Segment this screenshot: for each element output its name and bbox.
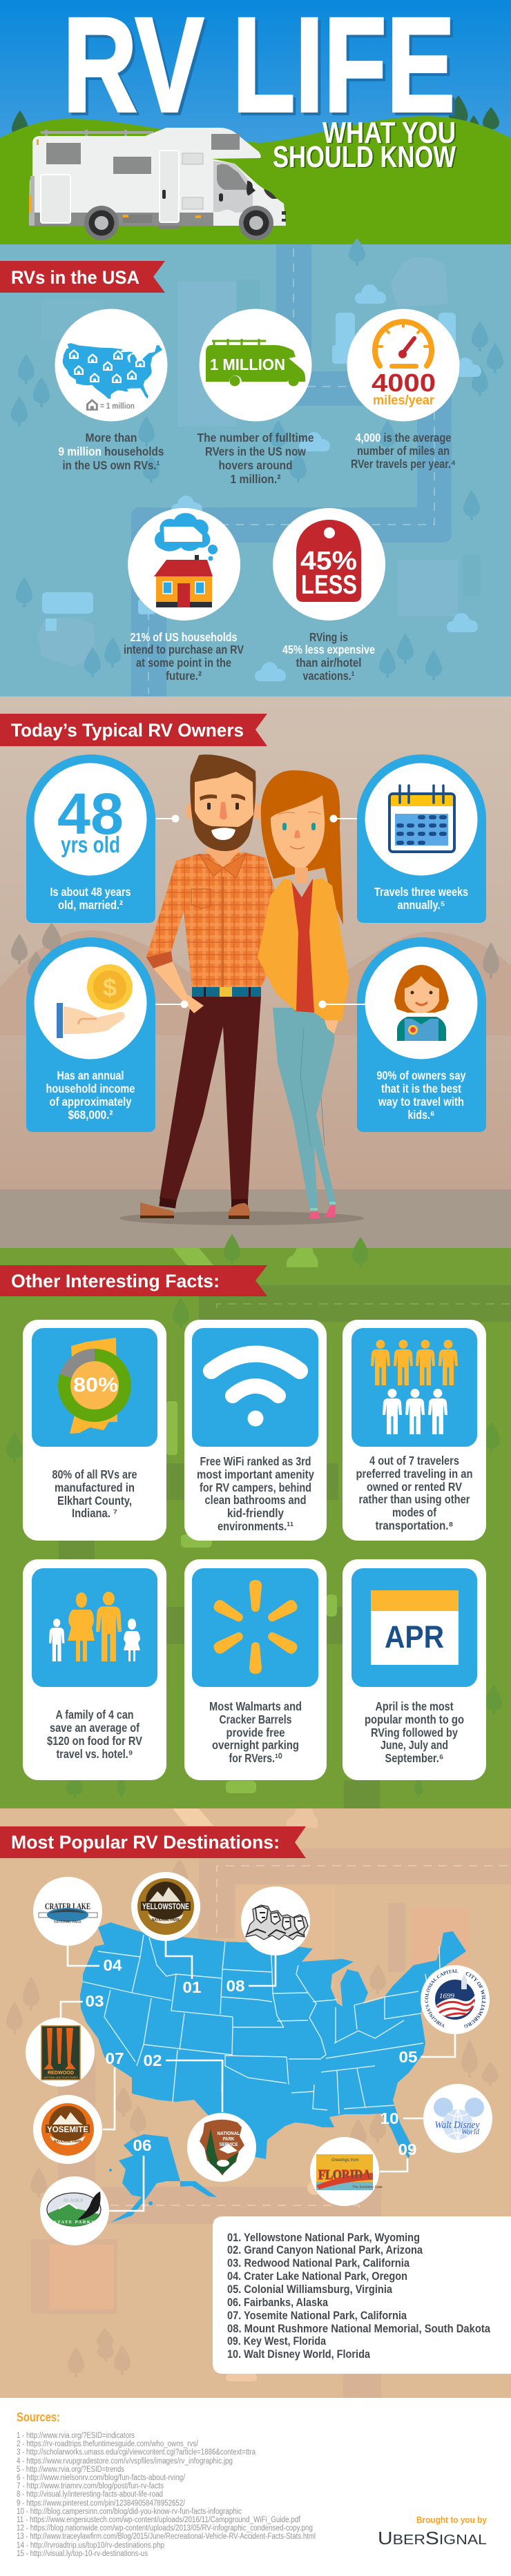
- legend: destination list: 06. Fairbanks, Alaska: [227, 2296, 328, 2309]
- map: contiguous United States: [80, 1922, 466, 2159]
- ribbon: Today's Typical RV Owners: [0, 714, 267, 746]
- text block: source list: 5 - http://www.rvia.org/?ESID=trends: [17, 2466, 124, 2474]
- ribbon: RVs in the USA: RVs in the USA: [11, 267, 139, 288]
- legend: destination list: 01. Yellowstone National Park, Wyoming: [227, 2231, 420, 2244]
- logo: Alaska State Parks: STATE PARKS: [54, 2220, 94, 2225]
- card: 4 out of 7 travelers: 4 out of 7 travelers: [369, 1454, 459, 1467]
- subtitle: what you should know: WHAT YOU: [322, 116, 456, 150]
- stat: 4000 miles per year: RVer travels per year.⁴: [351, 457, 456, 471]
- stat: 45% less expensive: vacations.¹: [302, 669, 355, 683]
- card: 80% Elkhart County: [23, 1320, 166, 1541]
- logo: Crater Lake: [33, 1877, 102, 1946]
- text block: source list: 1 - http://www.rvia.org/?ESID=indicators: [17, 2432, 135, 2440]
- logo: National Park Service: PARK: [222, 2137, 235, 2142]
- card: travels three weeks: Travels three weeks: [374, 885, 468, 899]
- legend: destination list: [213, 2216, 511, 2374]
- map numbers: 01: [182, 1978, 202, 1996]
- map numbers: 07: [105, 2049, 124, 2067]
- card: 4 out of 7 travelers: modes of: [392, 1505, 436, 1519]
- card: 4 out of 7 travelers: owned or rented RV: [367, 1480, 462, 1494]
- illustration: motorhome: [29, 128, 286, 240]
- logo: Colonial Williamsburg: CITY OF WILLIAMSBURG: [464, 1972, 485, 2028]
- stat: 4000 miles per year: miles/year: [373, 393, 435, 408]
- card: travel with kids: that it is the best: [381, 1082, 461, 1095]
- card: Walmarts and Cracker Barrels: provide free: [226, 1726, 285, 1739]
- stat: 45% less expensive: 45%: [300, 547, 357, 576]
- card: family of 4 saves: $120 on food for RV: [47, 1734, 142, 1748]
- card: Walmarts and Cracker Barrels: Most Walmarts and: [209, 1699, 302, 1713]
- stat: 9 million households: 9 million households: [58, 445, 164, 458]
- card: travels three weeks: annually.⁵: [398, 898, 445, 912]
- logo: National Park Service: SERVICE: [220, 2143, 238, 2147]
- logo: Redwood: REDWOOD: [48, 2069, 75, 2076]
- ribbon: Other Interesting Facts: Other Interesting Facts:: [11, 1271, 220, 1291]
- stat: 21% intend to purchase: at some point in the: [136, 656, 231, 670]
- subtitle: what you should know: [273, 116, 457, 175]
- stat: 45% less expensive: LESS: [301, 570, 357, 600]
- map numbers: 10: [380, 2109, 399, 2127]
- card: 48 years old: yrs old: [61, 832, 120, 857]
- card: household income: $: [103, 973, 117, 1002]
- map numbers: 03: [86, 1992, 104, 2010]
- man: [140, 754, 291, 1219]
- card: 80% Elkhart County: Elkhart County,: [57, 1494, 132, 1507]
- card: April most popular: RVing followed by: [371, 1726, 458, 1739]
- text block: source list: [17, 2432, 316, 2558]
- text block: source list: 3 - http://scholarworks.umass.edu/cgi/viewcontent.cgi?article=1886&context=ttra: [17, 2448, 256, 2457]
- card: household income: household income: [46, 1082, 135, 1095]
- card: travel with kids: 90% of owners say: [377, 1069, 466, 1082]
- card: free WiFi: for RV campers, behind: [200, 1481, 311, 1494]
- card: family of 4 saves: [23, 1559, 166, 1780]
- card: April most popular: popular month to go: [365, 1713, 464, 1726]
- stat: 9 million households: More than: [86, 431, 137, 445]
- stat: 1 million fulltime RVers: [197, 309, 314, 486]
- subtitle: what you should know: WHAT YOU: [324, 117, 457, 150]
- card: household income: [26, 937, 155, 1132]
- map numbers: 05: [399, 2048, 418, 2066]
- map numbers: 06: [133, 2136, 152, 2154]
- connectors to couple: [155, 815, 365, 1008]
- card: 4 out of 7 travelers: [343, 1320, 486, 1541]
- woman: [258, 770, 349, 1218]
- card: travel with kids: way to travel with: [378, 1095, 464, 1109]
- card: household income: Has an annual: [57, 1069, 124, 1082]
- map numbers: [86, 1956, 418, 2158]
- logo: Redwood: [26, 2018, 95, 2087]
- stat: 4000 miles per year: 4,000 is the average: [355, 431, 452, 445]
- map numbers: 02: [144, 2051, 162, 2069]
- stat: 9 million households: in the US own RVs.¹: [62, 458, 160, 472]
- credit: brought to you by UberSignal: [378, 2515, 487, 2548]
- logo: Florida postcard: [310, 2137, 383, 2206]
- text block: source list: 13 - http://www.traceylawfirm.com/Blog/2015/June/Recreational-Vehicle-RV-Accident-Facts-Stats.html: [17, 2533, 316, 2541]
- card: travel with kids: [357, 937, 486, 1132]
- ribbon: Today's Typical RV Owners: Today’s Typical RV Owners: [11, 720, 244, 741]
- card: April most popular: September.⁶: [385, 1751, 443, 1765]
- text block: source list: 15 - http://visual.ly/top-10-rv-destinations-us: [17, 2550, 148, 2558]
- map numbers: 04: [104, 1956, 122, 1974]
- connector lines: [61, 1940, 455, 2211]
- text block: source list: 11 - https://www.engeniustech.com/wp-content/uploads/2016/11/Campground_WiFi_Guide.pdf: [17, 2516, 301, 2524]
- stat: 1 million fulltime RVers: RVers in the US now: [205, 445, 306, 458]
- logo: Mount Rushmore: [241, 1886, 310, 1955]
- logo: Yosemite: [33, 2095, 102, 2164]
- card: family of 4 saves: A family of 4 can: [55, 1708, 134, 1721]
- card: 80% Elkhart County: 80% of all RVs are: [52, 1467, 137, 1481]
- card: April most popular: APR: [385, 1619, 444, 1655]
- logo: Colonial Williamsburg: [421, 1965, 490, 2034]
- card: 80% Elkhart County: 80%: [73, 1374, 118, 1396]
- logo: Yellowstone: YELLOWSTONE: [142, 1902, 189, 1911]
- text block: source list: 8 - http://visual.ly/interesting-facts-about-life-road: [17, 2490, 163, 2499]
- map: Alaska: [109, 2134, 217, 2223]
- stat: 1 million fulltime RVers: hovers around: [218, 458, 293, 472]
- panel: Today's Typical RV Owners: [0, 696, 511, 1248]
- legend: destination list: 02. Grand Canyon National Park, Arizona: [227, 2243, 423, 2256]
- logo: Florida postcard: FLORIDA: [318, 2167, 371, 2183]
- logo: Alaska State Parks: ALASKA: [63, 2198, 84, 2203]
- stat: 21% intend to purchase: 21% of US households: [130, 630, 238, 644]
- map numbers: 09: [398, 2140, 417, 2158]
- text block: source list: 4 - https://www.rvupgradestore.com/v/vspfiles/images/rv_infographic.jpg: [17, 2457, 233, 2466]
- legend: destination list: 05. Colonial Williamsburg, Virginia: [227, 2283, 392, 2296]
- card: travel with kids: kids.⁶: [407, 1108, 435, 1122]
- panel: RVs in the USA: [0, 238, 511, 696]
- ribbon: Most Popular RV Destinations: [0, 1826, 306, 1858]
- card: free WiFi: clean bathrooms and: [204, 1493, 307, 1507]
- text block: source list: 10 - http://blog.campersinn.com/blog/did-you-know-rv-fun-facts-infographic: [17, 2508, 242, 2516]
- card: household income: $68,000.²: [68, 1108, 113, 1122]
- logo: Crater Lake: CRATER LAKE: [45, 1901, 90, 1911]
- logo: Yosemite: YOSEMITE: [47, 2125, 88, 2134]
- panel: Other Interesting Facts: [0, 1234, 511, 1808]
- card: family of 4 saves: save an average of: [50, 1721, 139, 1735]
- legend: destination list: 09. Key West, Florida: [227, 2334, 326, 2348]
- stat: 9 million households: [55, 309, 167, 472]
- illustration: couple: [119, 754, 364, 1225]
- stat: 21% intend to purchase: [124, 508, 244, 683]
- card: 4 out of 7 travelers: rather than using other: [359, 1492, 470, 1506]
- text block: source list: 14 - http://rvroadtrip.us/top10/rv-destinations.php: [17, 2541, 164, 2550]
- logo: Yellowstone: [131, 1872, 200, 1941]
- card: 48 years old: 48: [57, 781, 124, 846]
- card: household income: of approximately: [50, 1095, 132, 1109]
- stat: 21% intend to purchase: intend to purchase an RV: [124, 643, 244, 656]
- logo: Colonial Williamsburg: 1699: [439, 1992, 454, 2000]
- stat: 45% less expensive: 45% less expensive: [282, 643, 375, 656]
- credit: brought to you by UberSignal: UBERSIGNAL: [378, 2528, 487, 2548]
- card: free WiFi: environments.¹¹: [218, 1519, 293, 1533]
- card: Walmarts and Cracker Barrels: overnight parking: [212, 1738, 299, 1752]
- logo: Alaska State Parks: [40, 2176, 109, 2245]
- subtitle: what you should know: SHOULD KNOW: [273, 140, 456, 174]
- logo: Yellowstone: NATIONAL PARK: [152, 1918, 180, 1922]
- logo: Walt Disney World: [423, 2084, 492, 2153]
- stat: 1 million fulltime RVers: The number of fulltime: [197, 431, 314, 445]
- card: free WiFi: kid-friendly: [227, 1506, 284, 1520]
- card: April most popular: April is the most: [376, 1699, 454, 1713]
- header: sky and hills: [0, 0, 511, 244]
- stat: 1 million fulltime RVers: 1 million.²: [231, 472, 281, 486]
- card: April most popular: June, July and: [380, 1738, 448, 1752]
- text block: source list: 6 - http://www.nielsonrv.com/blog/fun-facts-about-rving/: [17, 2474, 186, 2482]
- ribbon: Other Interesting Facts: [0, 1265, 267, 1296]
- ribbon: RVs in the USA: [0, 261, 165, 293]
- legend: destination list: 07. Yosemite National Park, California: [227, 2309, 407, 2322]
- stat: 9 million households: = 1 million: [100, 402, 135, 411]
- card: 80% Elkhart County: manufactured in: [55, 1481, 135, 1494]
- logo: Crater Lake: NATIONAL PARK: [54, 1920, 82, 1924]
- card: family of 4 saves: travel vs. hotel.⁹: [57, 1747, 133, 1761]
- heading: sources: Sources:: [17, 2410, 60, 2424]
- card: Walmarts and Cracker Barrels: Cracker Barrels: [220, 1713, 292, 1726]
- card: April most popular: [343, 1559, 486, 1780]
- logo: Walt Disney World: World: [461, 2127, 480, 2136]
- subtitle: what you should know: SHOULD KNOW: [274, 141, 457, 175]
- credit: brought to you by UberSignal: Brought to you by: [416, 2515, 487, 2525]
- card: free WiFi: [184, 1320, 327, 1541]
- logo: National Park Service: [187, 2113, 256, 2182]
- text block: source list: 12 - https://blog.nationwide.com/wp-content/uploads/2013/05/RV-infographic_condensed-copy.png: [17, 2524, 313, 2533]
- card: free WiFi: Free WiFi ranked as 3rd: [200, 1454, 311, 1468]
- logo: Redwood: NATIONAL AND STATE PARKS: [44, 2076, 78, 2079]
- stat: 4000 miles per year: [347, 309, 460, 471]
- card: 48 years old: [26, 754, 155, 923]
- card: 4 out of 7 travelers: transportation.⁸: [376, 1519, 453, 1532]
- text block: source list: 2 - https://rv-roadtrips.thefuntimesguide.com/who_owns_rvs/: [17, 2440, 199, 2448]
- logo: Florida postcard: The Sunshine State: [352, 2185, 383, 2189]
- logo: Florida postcard: Greetings from: [331, 2158, 359, 2163]
- stat: 4000 miles per year: number of miles an: [357, 444, 450, 458]
- card: Walmarts and Cracker Barrels: [184, 1559, 327, 1780]
- ribbon: Most Popular RV Destinations: Most Popular RV Destinations:: [11, 1832, 280, 1853]
- legend: destination list: 04. Crater Lake National Park, Oregon: [227, 2270, 407, 2283]
- text block: source list: 9 - https://www.pinterest.com/pin/123849058478952652/: [17, 2499, 186, 2508]
- card: 4 out of 7 travelers: preferred traveling in an: [356, 1467, 472, 1481]
- legend: destination list: 03. Redwood National Park, California: [227, 2256, 409, 2270]
- stat: 45% less expensive: than air/hotel: [296, 656, 362, 670]
- stat: 45% less expensive: RVing is: [309, 630, 348, 644]
- stat: 45% less expensive: [273, 508, 385, 683]
- card: travels three weeks: [357, 754, 486, 923]
- logo: Walt Disney World: Walt Disney: [435, 2120, 480, 2131]
- stat: 1 million fulltime RVers: 1 MILLION: [210, 355, 285, 373]
- map numbers: 08: [226, 1977, 245, 1995]
- stat: 21% intend to purchase: future.²: [166, 669, 202, 683]
- stat: 4000 miles per year: 4000: [372, 369, 436, 397]
- panel: Most Popular RV Destinations: [0, 1808, 511, 2398]
- card: 80% Elkhart County: Indiana. ⁷: [72, 1506, 117, 1520]
- logo: National Park Service: NATIONAL: [217, 2131, 240, 2136]
- text block: source list: 7 - http://www.triamrv.com/blog/post/fun-rv-facts: [17, 2482, 164, 2490]
- legend: destination list: 10. Walt Disney World, Florida: [227, 2348, 370, 2361]
- logo: Yosemite: NATIONAL PARK: [54, 2140, 82, 2144]
- logo: Colonial Williamsburg: VIRGINIA’S COLONIAL CAPITAL: [425, 1969, 459, 2028]
- card: 48 years old: Is about 48 years: [50, 885, 131, 899]
- card: 48 years old: old, married.²: [58, 898, 123, 912]
- card: Walmarts and Cracker Barrels: for RVers.¹⁰: [229, 1751, 282, 1765]
- card: free WiFi: most important amenity: [197, 1467, 314, 1481]
